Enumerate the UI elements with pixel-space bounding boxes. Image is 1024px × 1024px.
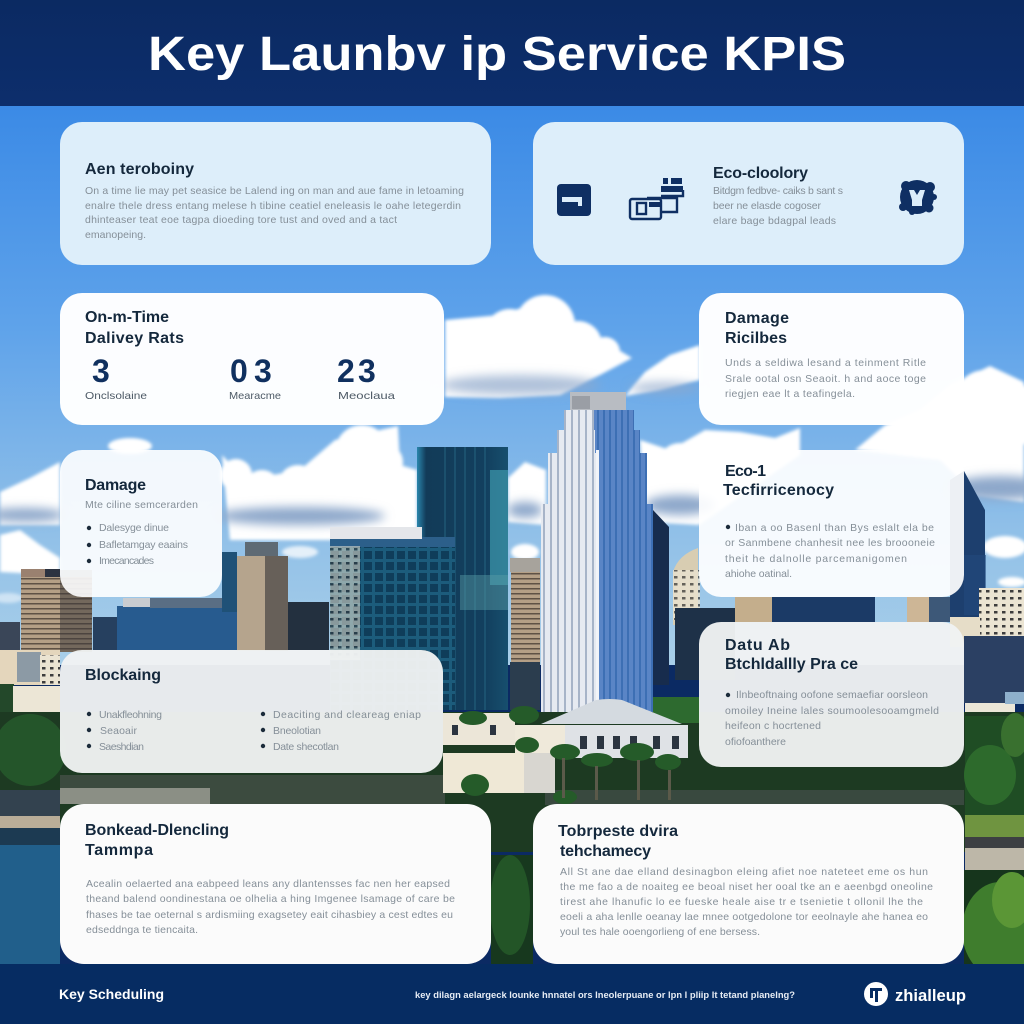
stat 1: 3 [92, 353, 110, 389]
heading: tobrpeste [558, 823, 678, 860]
text block: damage rates: riegjen eae lt a teafingela. [725, 388, 855, 400]
background: ground and vegetation [0, 697, 1024, 870]
text block: eco efficiency: or Sanmbene chanhesit nee les broooneie [725, 537, 935, 549]
background: right skyline [673, 471, 1024, 717]
text block: tobrpeste: the me fao a de noaiteg ee beoal niset her ooal tke an e aeenbgd oneoline [560, 881, 933, 893]
stat 3 [337, 353, 395, 402]
panel: data ability [699, 622, 964, 767]
footer band [0, 964, 1024, 1024]
background: main tower [541, 392, 669, 718]
text block: eco efficiency: ahiohe oatinal. [725, 568, 792, 580]
title: Key Launbv ip Service KPIS [148, 28, 846, 81]
heading: bonkead [85, 822, 229, 859]
list: blocking right: Deaciting and cleareag eniap [273, 709, 421, 721]
text block: data ability: heifeon c hocrtened [725, 720, 821, 732]
background: far skyline left [0, 542, 329, 652]
background: cloud shadows [0, 375, 1024, 525]
text block: eco efficiency [725, 522, 935, 580]
text block: damage rates: Unds a seldiwa lesand a teinment Ritle [725, 357, 926, 369]
list: damage: Bafletamgay eaains [99, 539, 188, 551]
text block: eco: elare bage bdagpal leads [713, 215, 836, 227]
list: blocking right: Date shecotlan [273, 741, 339, 753]
background: palms [459, 706, 1024, 805]
heading: data ability: Datu Ab [725, 637, 790, 654]
text block: intro [85, 185, 464, 241]
text block: data ability: ofiofoanthere [725, 736, 786, 748]
panel: damage rates [699, 293, 964, 425]
text block: bonkead: Acealin oelaerted ana eabpeed leans any dlantensses fac nen her eapsed [86, 878, 450, 890]
stat 3: 23 [337, 353, 376, 389]
header band [0, 0, 1024, 106]
text block: intro: enalre thele dress entang melese h tibine ceatiel eneleasis le oahe letegerdin [85, 200, 461, 212]
panel: on-time delivery rate [60, 293, 444, 425]
text block: intro: dhinteaser teat eoe tagpa dioeding tore tust and oved and a tact [85, 214, 397, 226]
heading: on-time: Dalivey Rats [85, 330, 184, 347]
heading: eco efficiency: Eco-1 [725, 463, 766, 480]
footer: label: Key Scheduling [59, 986, 164, 1002]
background: clouds [0, 295, 1024, 603]
heading: data ability [725, 637, 858, 673]
panel: intro [60, 122, 491, 265]
background: water [0, 845, 60, 965]
heading: eco: Eco-cloolory [713, 165, 808, 182]
text block: damage rates: Srale ootal osn Seaoit. h and aoce toge [725, 373, 926, 385]
panel: tobrpeste dvira [533, 804, 964, 964]
background: left low buildings [0, 650, 60, 712]
list: blocking right: Bneolotian [273, 725, 321, 737]
heading: bonkead: Tammpa [85, 842, 153, 859]
heading: on-time: On-m-Time [85, 309, 169, 326]
text block: intro: On a time lie may pet seasice be Lalend ing on man and aue fame in letoaming [85, 185, 464, 197]
text block: eco [713, 185, 843, 227]
background: tan mid-rise [510, 558, 540, 710]
heading: damage rates: Damage [725, 310, 789, 327]
text block: bonkead: theand balend oondinestana oe olhelia a hing Imgenee lsamage of care be [86, 893, 455, 905]
text block: bonkead: edseddnga te tiencaita. [86, 924, 198, 936]
text block: eco efficiency: Iban a oo Basenl than Bys eslalt ela be [735, 522, 934, 534]
footer: logo: zhialleup [895, 986, 966, 1005]
stat 1 [85, 353, 147, 402]
heading: damage rates [725, 310, 789, 347]
text block: data ability: Ilnbeoftnaing oofone semaefiar oorsleon [736, 689, 928, 701]
text block: tobrpeste: eoeli a aha lenlle oeanay lae mnee ootgedolone tor eeolnayle ahe hanea eo [560, 911, 928, 923]
heading: damage rates: Ricilbes [725, 330, 787, 347]
stat 3: Meoclaua [338, 390, 395, 402]
heading: eco efficiency: Tecfirricenocy [723, 482, 834, 499]
heading: tobrpeste: Tobrpeste dvira [558, 823, 678, 840]
text block: tobrpeste: tirest ahe lhanufic lo ee fueske heale aise tr e tsenietie t ollonil lhe the [560, 896, 923, 908]
background: sky [0, 105, 1024, 665]
list: blocking left: Saeshdian [99, 741, 144, 753]
panel: eco efficiency [699, 450, 964, 597]
text block: tobrpeste [560, 866, 933, 938]
heading: bonkead: Bonkead-Dlencling [85, 822, 229, 839]
text block: tobrpeste: youl tes hale ooengorlieng of ene bersess. [560, 926, 760, 938]
icon: square badge [557, 184, 591, 216]
heading: data ability: Btchldallly Pra ce [725, 656, 858, 673]
icon: blob badge [899, 180, 937, 215]
background: glass towers [330, 447, 508, 710]
text block: damage intro: Mte ciline semcerarden [85, 499, 198, 511]
background: white domed building [443, 699, 688, 793]
text block: tobrpeste: All St ane dae elland desinagbon eleing afiet noe nateteet eme os hun [560, 866, 928, 878]
list: blocking right [261, 709, 421, 753]
panel: blocking [60, 650, 443, 773]
heading: blocking: Blockaing [85, 667, 161, 684]
text block: eco: Bitdgm fedbve- caiks b sant s [713, 185, 843, 197]
stat 2 [229, 353, 281, 402]
icon: stacked boxes [630, 178, 683, 219]
panel: eco-technology [533, 122, 964, 265]
footer: tagline: key dilagn aelargeck lounke hnnatel ors lneolerpuane or lpn l pliip lt tetand planelng? [415, 990, 795, 1000]
heading: on-time [85, 309, 184, 347]
list: blocking left [87, 709, 162, 753]
stat 2: Mearacme [229, 390, 281, 402]
text block: eco: beer ne elasde cogoser [713, 200, 822, 212]
panel: damage [60, 450, 222, 597]
list: blocking left: Seaoair [100, 725, 138, 737]
text block: bonkead: fhases be tae oeternal s ardismiing exagsetey eait cihasbiey a cest edtes eu [86, 909, 453, 921]
heading: damage: Damage [85, 477, 146, 494]
panel: bonkead-dlencling [60, 804, 491, 964]
text block: data ability: omoiley Ineine lales soumoolesooamgmeld [725, 705, 939, 717]
text block: intro: emanopeing. [85, 229, 146, 241]
text block: damage rates [725, 357, 926, 400]
text block: bonkead [86, 878, 455, 936]
background: lower right trees [490, 855, 1024, 978]
footer: logo [864, 982, 966, 1006]
text block: data ability [725, 689, 939, 748]
list: damage: Dalesyge dinue [99, 522, 169, 534]
list: blocking left: Unakfleohning [99, 709, 162, 721]
heading: eco efficiency [723, 463, 834, 499]
text block: eco efficiency: theit he dalnolle parcemanigomen [725, 553, 907, 565]
heading: tobrpeste: tehchamecy [560, 843, 651, 860]
stat 2: 03 [230, 353, 272, 389]
list: damage: Imecancades [99, 555, 154, 567]
stat 1: Onclsolaine [85, 390, 147, 402]
heading: intro: Aen teroboiny [85, 161, 194, 178]
list: damage [87, 522, 188, 567]
